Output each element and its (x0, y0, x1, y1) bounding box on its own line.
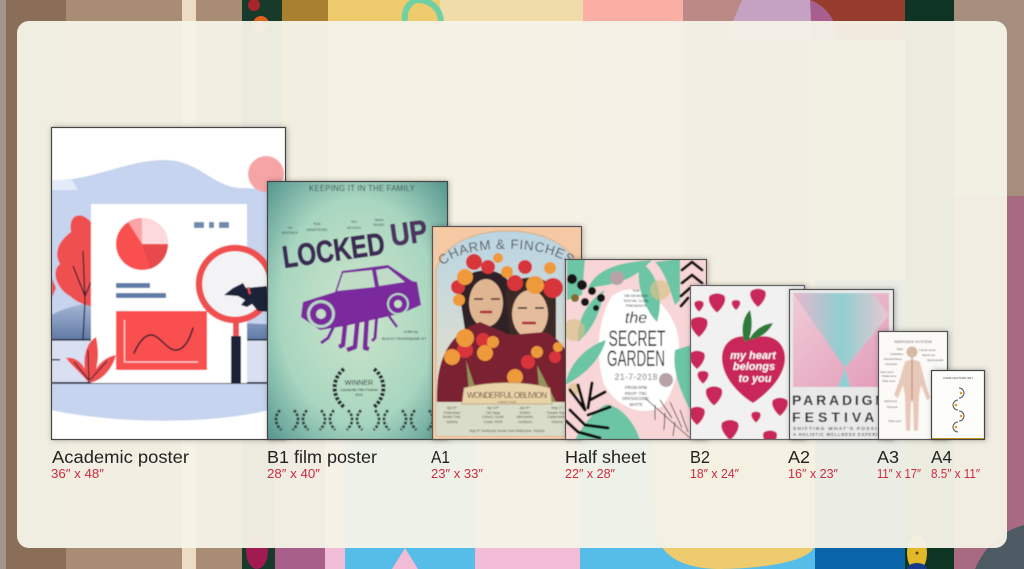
info block (436, 402, 579, 436)
cast names: Tim (287, 226, 293, 230)
award laurel (335, 369, 383, 407)
award laurel: Lazzarotto Film Festival (341, 388, 378, 392)
tour dates: Old Tanja (486, 411, 500, 415)
label: A2: A2 (788, 447, 810, 467)
label: academic poster: 36″ x 48″ (51, 467, 105, 481)
tour dates: May 9ᵗʰ Northcote Social Club Melbourne, Victoria (469, 429, 545, 433)
label: B1 film poster (267, 447, 377, 481)
nerve labels: Spinal ganglia (927, 358, 944, 362)
label: A2 (788, 447, 839, 481)
invitation text: WHITE (629, 402, 643, 407)
poster: B1 film poster, Locked Up: BUGSY RIVERBANK ST (382, 336, 427, 341)
label: B2: 18″ x 24″ (690, 467, 740, 481)
nerve labels: Peroneal (887, 405, 898, 409)
nerve labels: Tibial nerve (888, 419, 902, 423)
tour dates: Bowls Club, (443, 415, 461, 419)
tour dates: Church, South (482, 415, 504, 419)
strawberry pattern (689, 289, 788, 447)
feature arcs (953, 388, 964, 432)
tour dates: Victoria (551, 420, 563, 424)
poster: B1 film poster, Locked Up: A film by (404, 330, 418, 334)
nerve labels: Spinal cord (922, 353, 936, 357)
label: A4 (931, 447, 981, 481)
pale blots (563, 271, 673, 395)
poster: A2, Paradigm Festival (789, 289, 894, 440)
poster: B2, My heart belongs to you (689, 285, 805, 447)
illustration: plant (66, 337, 116, 383)
heart strawberry: my heart (730, 350, 777, 362)
tour dates: Apr 5ᵗʰ (520, 406, 531, 410)
tour dates (443, 406, 568, 433)
nerve labels: Ulnar nerve (880, 370, 894, 374)
black berries (567, 274, 605, 311)
label: A2: 16″ x 23″ (788, 467, 839, 481)
fern lines (645, 398, 690, 438)
invitation text: THE (632, 289, 640, 293)
nerve labels: Cerebellum (890, 352, 903, 356)
label: academic poster: Academic poster (52, 447, 189, 467)
nerve labels: Radial nerve (882, 374, 897, 378)
tour dates: Apr 10ᵗʰ (487, 406, 500, 410)
tour dates: Castlemaine, (547, 415, 567, 419)
label: B2 (690, 447, 740, 481)
tour dates: Theatre Royal (546, 411, 568, 415)
green leaves (566, 260, 690, 439)
banner: ALBUM TOUR (498, 400, 516, 404)
poster: academic (51, 127, 286, 440)
nerve labels: Brachial Plexus (884, 357, 903, 361)
illustration: pie chart (116, 218, 168, 270)
anatomical figure (894, 346, 930, 431)
award laurel: 2014 (355, 393, 363, 397)
invitation text: PRESENTS (626, 304, 647, 308)
heart strawberry: to you (738, 373, 772, 385)
label: B1 film poster: B1 film poster (267, 447, 377, 467)
label: A4: A4 (931, 447, 952, 467)
illustration: car with legs (301, 265, 421, 350)
illustration: sun (248, 156, 284, 192)
label: A3: 11″ x 17″ (877, 467, 922, 481)
heart strawberry: belongs (733, 361, 775, 373)
arched title: CHARM & FINCHES (438, 239, 574, 264)
label: A3 (877, 447, 922, 481)
nerve labels: Saphenous (884, 399, 898, 403)
illustration: two women with flower crowns (437, 253, 580, 402)
festival laurels (276, 410, 433, 430)
invitation text: GARDEN (607, 346, 665, 371)
illustration: document (91, 204, 247, 383)
label: A1: 23″ x 33″ (431, 467, 484, 481)
cast names: ARMSTRONG (307, 228, 328, 232)
cast names: Ross (313, 222, 321, 226)
poster: B1 film poster, Locked Up (267, 181, 448, 440)
invitation text: RSVP: TBC (625, 391, 647, 396)
tour dates: May 1ˢᵗ (551, 406, 563, 410)
invitation text: SOCIAL CLUB (624, 299, 649, 303)
label: half sheet (565, 447, 646, 481)
tour dates: Coast, NSW (484, 420, 503, 424)
award laurel: WINNER (345, 380, 373, 387)
festival title: SHIFTING WHAT'S POSSIBLE (793, 426, 891, 432)
invitation text (607, 289, 666, 407)
tagline: KEEPING IT IN THE FAMILY (309, 184, 416, 193)
white central blob (599, 289, 679, 411)
cast names: Tom (351, 220, 357, 224)
cast names: James (374, 218, 384, 222)
poster: A1, Charm & Finches (430, 222, 586, 444)
cast names: MCHUGH (347, 226, 362, 230)
nerve labels (880, 347, 944, 423)
invitation text: the (625, 310, 647, 327)
cast names (282, 218, 386, 235)
label: A1 (431, 447, 484, 481)
poster: A3, nervous system: NERVOUS SYSTEM (894, 340, 932, 344)
label: half sheet: 22″ x 28″ (565, 467, 616, 481)
tour dates: Sydney (446, 420, 458, 424)
poster: half sheet, The Secret Garden (563, 259, 707, 440)
label: B2: B2 (690, 447, 710, 467)
festival title: FESTIVAL (792, 409, 887, 425)
nerve labels: Cranial nerves (919, 348, 936, 352)
arch (436, 231, 579, 436)
tour dates: Apr 8ᵗʰ (447, 406, 458, 410)
label: A1: A1 (431, 447, 450, 467)
banner: WONDERFUL OBLIVION (467, 391, 547, 400)
festival title: PARADIGM (792, 392, 887, 408)
illustration: blue landscape (51, 160, 286, 421)
illustration: line chart (116, 311, 207, 370)
invitation text: SECRET (608, 326, 666, 351)
label: half sheet: Half sheet (565, 447, 646, 467)
nerve labels: Intercostal (885, 362, 897, 366)
illustration: red tree (52, 215, 91, 340)
invitation text: FROM 6PM (625, 385, 648, 390)
poster: A4, core feature set: CORE FEATURE SET (943, 376, 973, 380)
nerve labels: Brain (897, 347, 904, 351)
tour dates: Petersham (444, 411, 460, 415)
poster: A3, nervous system (878, 331, 948, 440)
cast names: RUGBY (373, 223, 386, 227)
gradient artwork (793, 293, 889, 387)
cast names: BENTINCK (282, 231, 299, 235)
festival title: A HOLISTIC WELLNESS EXPERIENCE (793, 432, 892, 437)
invitation text: DB DESIGNS (624, 294, 648, 298)
poster: A4, core feature set (931, 370, 985, 440)
label: A3: A3 (877, 447, 899, 467)
film title: LOCKED (280, 226, 387, 275)
festival title (792, 394, 878, 436)
black leaves (565, 262, 702, 438)
banner (462, 383, 552, 404)
label: academic poster (51, 447, 189, 481)
film title: UP (388, 213, 430, 253)
label: B1 film poster: 28″ x 40″ (267, 467, 321, 481)
invitation text: 21-7-2018 (614, 372, 658, 382)
tour dates: Canberra (518, 420, 532, 424)
invitation text: DRESSCODE: (622, 396, 650, 401)
heart strawberry (722, 310, 785, 403)
tour dates: Alternative, (517, 415, 534, 419)
illustration: magnifier with dog (199, 248, 271, 383)
label: A4: 8.5″ x 11″ (931, 467, 981, 481)
nerve labels: Tibial nerve (882, 379, 896, 383)
tour dates: Smith's (519, 411, 531, 415)
